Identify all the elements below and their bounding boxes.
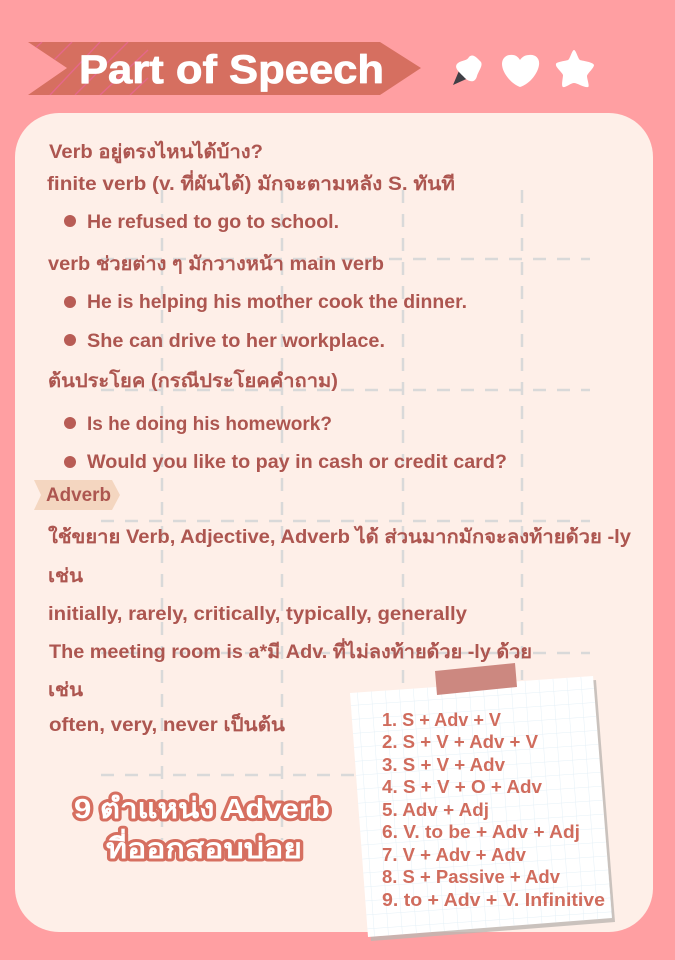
line: auxiliary verb: verb ช่วยต่าง ๆ มักวางหน้า main verb — [48, 253, 384, 275]
text block: adverb explanation — [48, 525, 631, 736]
bullet dot — [64, 215, 76, 227]
icon: star — [556, 50, 594, 87]
line: adverb examples: initially, rarely, critically, typically, generally — [48, 604, 467, 625]
callout heading: 9 adverb positions: 9 ตำแหน่ง Adverb — [74, 793, 330, 824]
example sentence: She can drive to her workplace. — [87, 331, 385, 352]
example sentence: Is he doing his homework? — [87, 414, 332, 435]
heading: verb question: Verb อยู่ตรงไหนได้บ้าง? — [49, 140, 263, 164]
bullet dot — [64, 296, 76, 308]
line: adverb use: ใช้ขยาย Verb, Adjective, Adverb ได้ ส่วนมากมักจะลงท้ายด้วย -ly — [48, 525, 631, 548]
list of adverb patterns: 1. S + Adv + V — [382, 710, 501, 730]
note paper — [350, 663, 615, 941]
adverb tag: Adverb — [46, 485, 111, 506]
line: meeting room: The meeting room is a*มี Adv. ที่ไม่ลงท้ายด้วย -ly ด้วย — [49, 638, 532, 663]
dashed grid background — [101, 190, 590, 840]
bullet dot — [64, 334, 76, 346]
callout heading: 9 adverb positions — [74, 793, 330, 864]
title banner — [28, 42, 421, 95]
title text: Part of Speech — [79, 48, 384, 92]
list of adverb patterns: 9. to + Adv + V. Infinitive — [382, 890, 605, 910]
example sentence: He refused to go to school. — [87, 212, 339, 233]
line: sentence start: ต้นประโยค (กรณีประโยคคำถาม) — [48, 369, 338, 392]
icon: pin — [453, 56, 482, 85]
list of adverb patterns — [382, 710, 605, 910]
list of adverb patterns: 5. Adv + Adj — [382, 800, 489, 820]
list of adverb patterns: 4. S + V + O + Adv — [382, 777, 542, 797]
adverb tag — [34, 480, 120, 510]
list of adverb patterns: 8. S + Passive + Adv — [382, 867, 560, 887]
example sentence: He is helping his mother cook the dinner. — [87, 292, 467, 313]
list of adverb patterns: 7. V + Adv + Adv — [382, 845, 526, 865]
callout heading: 9 adverb positions: ที่ออกสอบบ่อย — [106, 828, 302, 864]
text block: verb positions — [47, 140, 507, 473]
bullet dot — [64, 417, 76, 429]
list of adverb patterns: 2. S + V + Adv + V — [382, 732, 538, 752]
line: for example: เช่น — [48, 680, 83, 701]
icon: heart — [502, 55, 539, 87]
line: non-ly examples: often, very, never เป็นต้น — [49, 712, 285, 736]
list of adverb patterns: 6. V. to be + Adv + Adj — [382, 822, 580, 842]
line: finite verb: finite verb (v. ที่ผันได้) มักจะตามหลัง S. ทันที — [47, 170, 455, 195]
bullet dot — [64, 456, 76, 468]
example sentence: Would you like to pay in cash or credit card? — [87, 452, 507, 473]
line: for example: เช่น — [48, 566, 83, 587]
tape — [435, 663, 517, 695]
list of adverb patterns: 3. S + V + Adv — [382, 755, 505, 775]
